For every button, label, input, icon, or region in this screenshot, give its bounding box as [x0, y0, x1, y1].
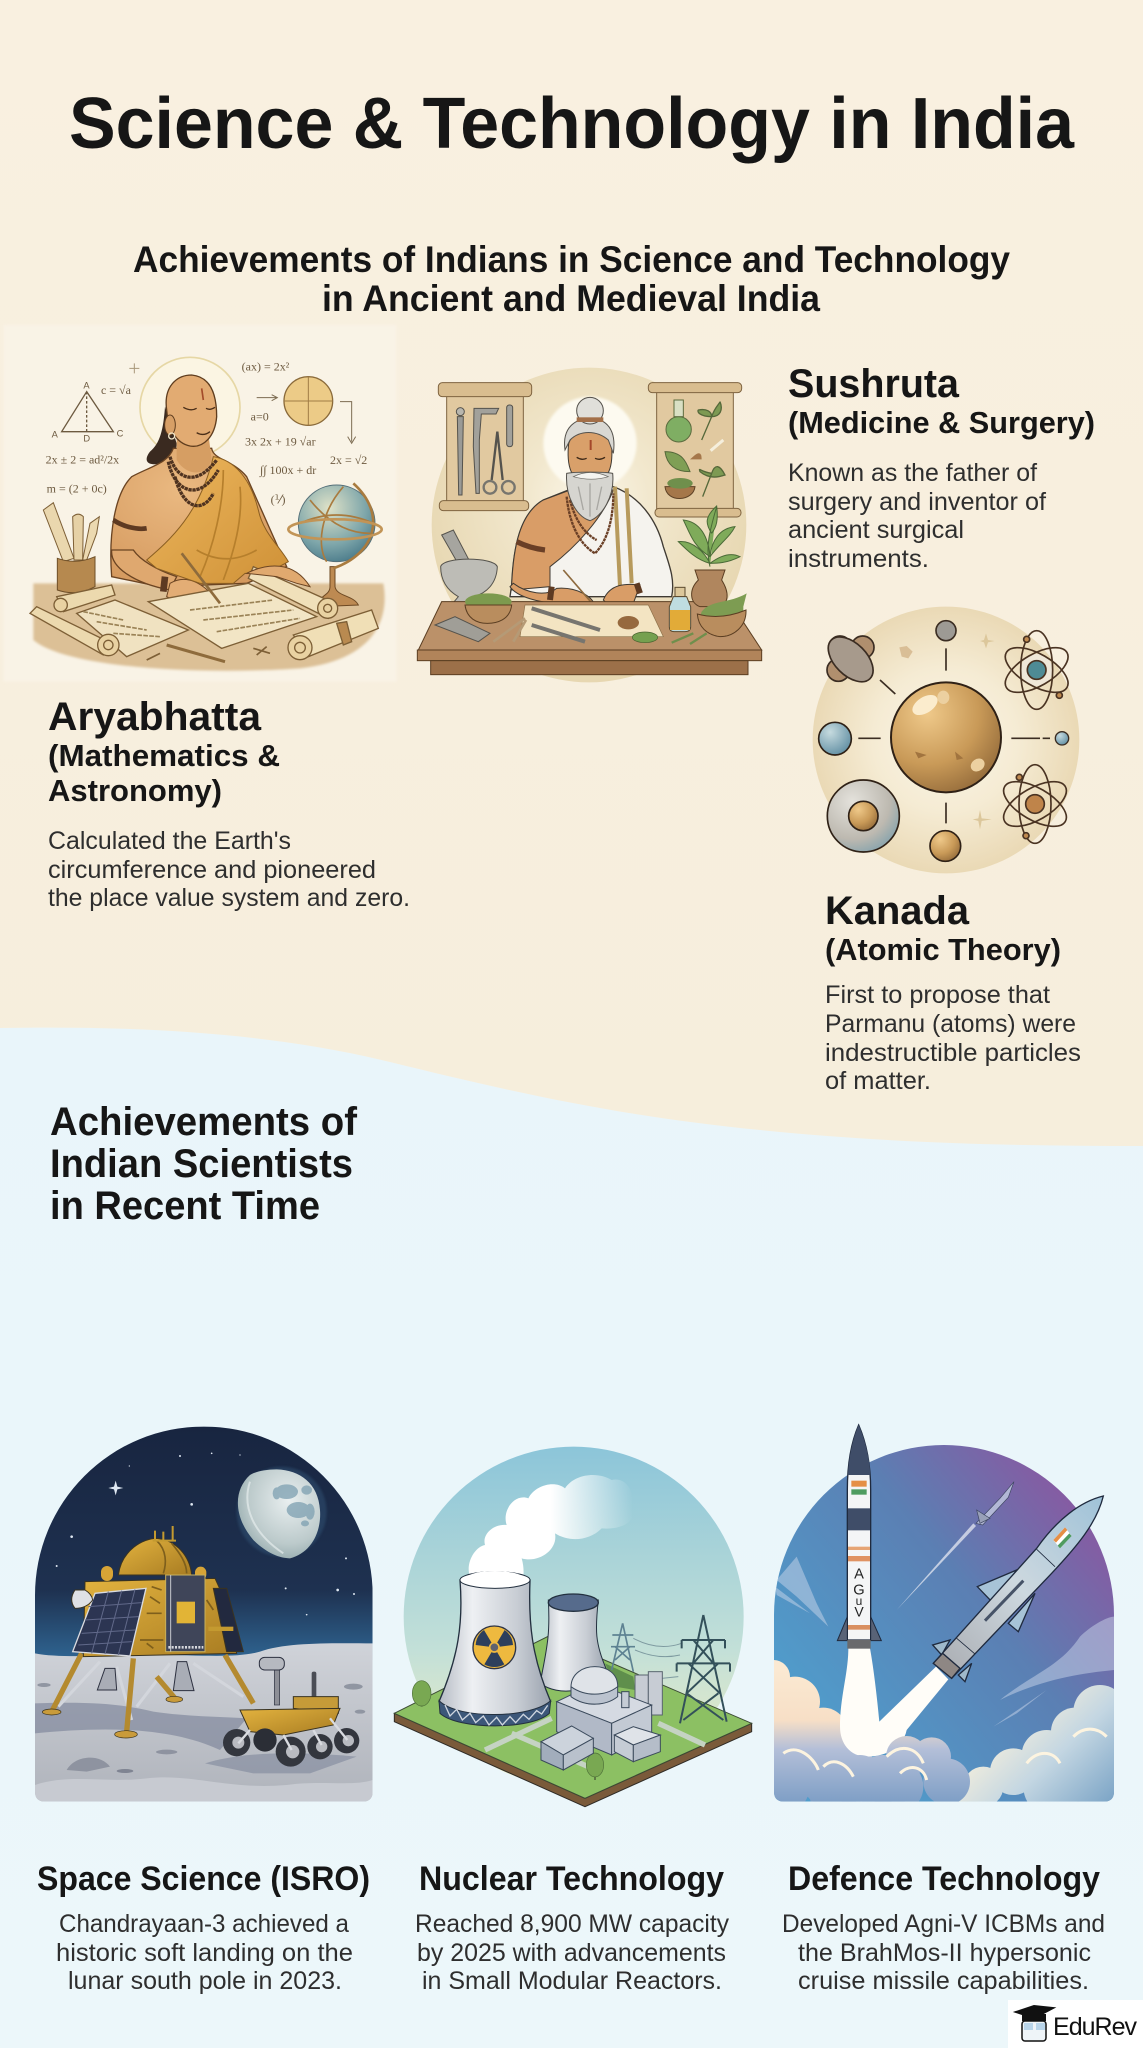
- backdrop circle: [432, 368, 746, 682]
- formulas: m = (2 + 0c): [47, 481, 107, 495]
- caption: space science: lunar south pole in 2023.: [68, 1967, 342, 1995]
- lander: [42, 1526, 253, 1738]
- molecule: [820, 629, 881, 690]
- section heading: recent time: [50, 1100, 358, 1228]
- backdrop circle: [813, 607, 1079, 873]
- section heading: recent time: Indian Scientists: [50, 1142, 353, 1186]
- text: Kanada: Parmanu (atoms) were: [825, 1010, 1076, 1038]
- sensor: [72, 1590, 93, 1608]
- text: Aryabhatta: Calculated the Earth's: [48, 827, 291, 855]
- Agni rocket: [837, 1425, 881, 1649]
- connector lines: [858, 648, 1050, 823]
- panel: defence technology illustration: [774, 1424, 1114, 1802]
- text: Sushruta: (Medicine & Surgery): [788, 405, 1095, 440]
- text: Kanada: [825, 889, 1081, 1095]
- text: Aryabhatta: Aryabhatta: [48, 695, 262, 739]
- front clouds: [782, 1728, 1108, 1802]
- section heading: recent time: in Recent Time: [50, 1184, 320, 1228]
- back clouds left: [774, 1660, 892, 1802]
- moon: [237, 1467, 327, 1558]
- text: Aryabhatta: Astronomy): [48, 773, 222, 808]
- rear pylon: [611, 1623, 682, 1678]
- center gray plate: [166, 1575, 205, 1652]
- text: Aryabhatta: [48, 695, 410, 912]
- legs: [52, 1653, 253, 1732]
- background: warm beige upper section: [0, 0, 1143, 1200]
- blue particle: [819, 722, 851, 755]
- halo: [140, 357, 240, 457]
- formulas: [46, 360, 367, 506]
- scrolls: [30, 567, 378, 660]
- caption: defence technology: [782, 1860, 1105, 1995]
- caption: defence technology: Developed Agni-V ICBMs and: [782, 1910, 1105, 1938]
- hair: [147, 407, 177, 464]
- head halo: [543, 397, 637, 490]
- small particle right: [1055, 732, 1069, 745]
- text: Sushruta: [788, 362, 1095, 573]
- panel: nuclear technology illustration: [394, 1447, 752, 1807]
- caption: defence technology: the BrahMos-II hypersonic: [798, 1939, 1091, 1967]
- panel: space science illustration: [35, 1427, 373, 1802]
- section heading: ancient and medieval: in Ancient and Medieval India: [322, 278, 820, 319]
- reactor building: [541, 1667, 660, 1770]
- triangle diagram: A: [83, 380, 90, 390]
- sky circle: [404, 1447, 744, 1787]
- sky: [35, 1427, 373, 1660]
- sparkles: [973, 633, 995, 829]
- text: Kanada: Kanada: [825, 889, 970, 933]
- sky: [774, 1445, 1114, 1802]
- caption: space science: [37, 1860, 370, 1995]
- figure body: [111, 448, 287, 587]
- text: Sushruta: surgery and inventor of: [788, 488, 1046, 516]
- body: [510, 487, 673, 597]
- formulas: (⅟): [271, 492, 285, 506]
- tanks: [635, 1672, 662, 1715]
- caption: nuclear technology: [415, 1860, 729, 1995]
- triangle diagram: A: [52, 429, 59, 439]
- scroll of herbs: [648, 383, 742, 517]
- illustration: Aryabhatta: [3, 325, 397, 682]
- logo: EduRev: EduRev: [1053, 2013, 1138, 2041]
- cooling tower front: [439, 1571, 551, 1726]
- Agni rocket: V: [854, 1604, 864, 1620]
- text: Sushruta: Sushruta: [788, 362, 960, 406]
- text: Sushruta: instruments.: [788, 545, 929, 573]
- BrahMos missile: [933, 1496, 1103, 1682]
- cup and pencils: [43, 503, 99, 593]
- text: Kanada: of matter.: [825, 1067, 931, 1095]
- trees: [412, 1681, 604, 1780]
- central sphere: [891, 682, 1001, 792]
- gray particle: [936, 621, 956, 641]
- ground plate: [394, 1636, 752, 1807]
- exhaust plumes: [840, 1648, 948, 1757]
- necklaces: [168, 457, 218, 506]
- text: Sushruta: Known as the father of: [788, 459, 1037, 487]
- background: pale blue lower section with wave edge: [0, 1028, 1143, 2048]
- annex: [614, 1727, 660, 1745]
- Agni rocket: G: [853, 1582, 865, 1598]
- armband: [113, 520, 147, 529]
- atom bottom right: [997, 765, 1073, 843]
- engines: [97, 1662, 194, 1691]
- bowl of herbs right: [697, 593, 747, 637]
- text: Aryabhatta: (Mathematics &: [48, 738, 280, 773]
- stars: [56, 1452, 355, 1615]
- mortar and pestle: [441, 530, 497, 607]
- bowl of herbs left: [465, 593, 512, 623]
- section heading: ancient and medieval: Achievements of Indians in Science and Technology: [133, 239, 1010, 280]
- rover: [223, 1657, 359, 1767]
- front pylon: [677, 1615, 730, 1723]
- title: Science & Technology in India: [69, 84, 1075, 164]
- radiation symbol: [473, 1626, 516, 1669]
- atom top right: [998, 631, 1075, 709]
- beard: [567, 472, 613, 521]
- plant and pot: [678, 506, 740, 607]
- formulas: c = √a: [101, 383, 132, 397]
- text: Kanada: First to propose that: [825, 981, 1050, 1009]
- robe: [147, 457, 288, 583]
- caption: defence technology: cruise missile capabilities.: [798, 1967, 1089, 1995]
- caption: space science: Chandrayaan-3 achieved a: [59, 1910, 349, 1938]
- Agni rocket: u: [856, 1594, 862, 1608]
- Agni rocket: A: [854, 1566, 864, 1582]
- text: Sushruta: ancient surgical: [788, 516, 964, 544]
- section heading: ancient and medieval: [133, 239, 1010, 319]
- caption: nuclear technology: in Small Modular Reactors.: [422, 1967, 722, 1995]
- caption: nuclear technology: Reached 8,900 MW capacity: [415, 1910, 729, 1938]
- text: Kanada: (Atomic Theory): [825, 932, 1061, 967]
- smoke plume: [469, 1475, 633, 1587]
- illustration: Kanada atoms: [813, 607, 1079, 873]
- oil bottle: [669, 587, 691, 632]
- clouds right: [959, 1685, 1114, 1802]
- cooling tower rear: [540, 1594, 607, 1691]
- head: [568, 432, 612, 483]
- text: Aryabhatta: the place value system and zero.: [48, 884, 410, 912]
- stylus: [182, 553, 220, 603]
- caption: space science: historic soft landing on the: [56, 1939, 353, 1967]
- sphere diagram: [284, 377, 333, 425]
- bottom particle: [930, 831, 961, 861]
- writing lines: [83, 600, 300, 637]
- formulas: ∫∫ 100x + dr: [259, 463, 316, 477]
- formulas: 3x 2x + 19 √ar: [245, 434, 316, 448]
- triangle diagram: D: [83, 434, 90, 444]
- globe: [288, 483, 382, 607]
- triangle diagram: C: [117, 429, 124, 439]
- section heading: recent time: Achievements of: [50, 1100, 358, 1144]
- light wisps: [775, 1557, 1114, 1727]
- table: [417, 602, 762, 675]
- table: [33, 583, 385, 671]
- neck and head: [177, 433, 212, 472]
- caption: nuclear technology: by 2025 with advancements: [417, 1939, 726, 1967]
- formulas: 2x = √2: [330, 453, 367, 467]
- logo: EduRev: [1008, 2000, 1143, 2048]
- scroll of instruments: [438, 383, 532, 511]
- solar panel: [73, 1588, 146, 1656]
- caption: space science: Space Science (ISRO): [37, 1860, 370, 1898]
- formulas: (ax) = 2x²: [242, 360, 290, 374]
- small missile: [897, 1482, 1014, 1610]
- struts: [58, 1662, 243, 1720]
- formulas: 2x ± 2 = ad²/2x: [46, 452, 119, 466]
- formulas: a=0: [251, 410, 269, 424]
- caption: nuclear technology: Nuclear Technology: [419, 1860, 724, 1898]
- ground: [35, 1643, 373, 1802]
- shelled particle: [827, 780, 899, 852]
- rear hill: [605, 1663, 635, 1690]
- text: Aryabhatta: circumference and pioneered: [48, 856, 376, 884]
- hands and stylus: [510, 583, 595, 607]
- caption: defence technology: Defence Technology: [788, 1860, 1100, 1898]
- text: Kanada: indestructible particles: [825, 1039, 1081, 1067]
- arm: [112, 550, 177, 590]
- triangle diagram: [52, 380, 124, 444]
- writing hand: [247, 566, 310, 587]
- illustration: Sushruta: [417, 368, 762, 682]
- body: [83, 1578, 237, 1657]
